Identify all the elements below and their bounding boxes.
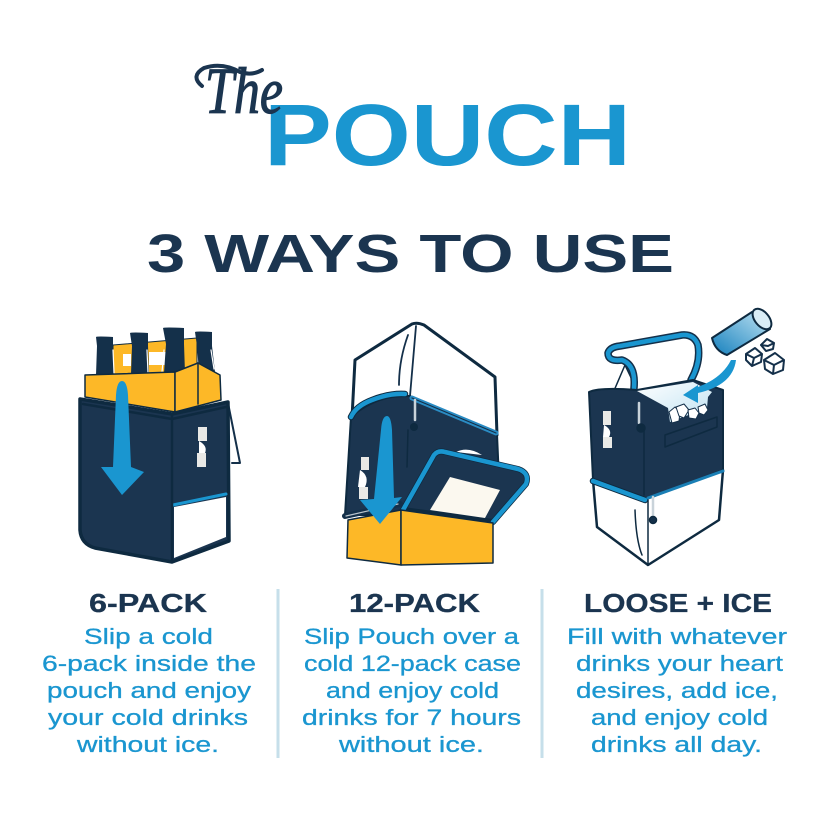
description: loose + ice: and enjoy cold — [591, 705, 768, 730]
falling ice cubes — [746, 339, 784, 374]
heading: 12-pack: 12-PACK — [349, 588, 480, 618]
bag white bottom — [593, 470, 723, 565]
can — [712, 312, 770, 355]
carton back handle — [113, 338, 197, 375]
can lid — [749, 305, 775, 333]
handle patches — [358, 457, 369, 499]
down arrow — [101, 381, 144, 495]
illustration: pouch over 12-pack — [345, 323, 527, 565]
description: loose + ice — [567, 624, 787, 757]
side zipper strip — [345, 504, 400, 516]
carton front face — [85, 372, 175, 412]
lid — [403, 451, 527, 522]
blue band — [593, 481, 645, 500]
bottle highlights — [113, 350, 214, 373]
description: 12-pack: and enjoy cold — [326, 678, 499, 703]
side strap — [228, 403, 240, 463]
front pocket — [665, 417, 717, 447]
flap triangle — [613, 365, 636, 393]
lid white square — [430, 477, 500, 518]
blue loop strap — [608, 335, 699, 388]
carton side face — [175, 363, 221, 412]
description: 12-pack: Slip Pouch over a — [304, 624, 520, 649]
description: 12-pack: without ice. — [338, 732, 484, 757]
white top section — [352, 323, 497, 435]
bag interior — [637, 382, 712, 422]
top seam — [83, 404, 226, 419]
ice cubes in bag — [669, 404, 708, 423]
title: script The: The — [205, 55, 283, 128]
navy body — [345, 396, 499, 515]
illustration: loose drinks and ice — [589, 305, 784, 565]
pouch body — [80, 399, 229, 562]
box left face — [347, 510, 401, 565]
description: 6-pack: Slip a cold — [84, 624, 213, 649]
description: 12-pack — [302, 624, 521, 757]
description: 6-pack: your cold drinks — [48, 705, 248, 730]
zipper — [412, 398, 496, 433]
lower zipper — [648, 471, 723, 498]
description: 6-pack — [42, 624, 256, 757]
corner seam — [171, 414, 173, 560]
description: loose + ice: Fill with whatever — [567, 624, 787, 649]
description: 12-pack: drinks for 7 hours — [302, 705, 521, 730]
handle patches — [603, 411, 612, 448]
column: 6-pack — [42, 588, 256, 757]
navy bag body — [589, 380, 723, 499]
pouch white panel — [174, 497, 226, 558]
down arrow — [360, 416, 402, 524]
blue rim — [351, 394, 405, 417]
heading: loose + ice: LOOSE + ICE — [584, 588, 772, 618]
description: 6-pack: pouch and enjoy — [47, 678, 251, 703]
description: 6-pack: without ice. — [76, 732, 219, 757]
column: 12-pack — [302, 588, 521, 757]
fold creases — [399, 326, 416, 396]
description: 12-pack: cold 12-pack case — [304, 651, 521, 676]
handle patches — [197, 427, 207, 467]
pouch blue band — [173, 494, 226, 505]
bottles — [96, 328, 215, 375]
curved arrow — [683, 360, 736, 403]
description: loose + ice: drinks your heart — [576, 651, 783, 676]
description: 6-pack: 6-pack inside the — [42, 651, 256, 676]
title: POUCH: POUCH — [264, 87, 631, 184]
heading: 3 ways to use: 3 WAYS TO USE — [147, 224, 674, 284]
white peek above lid — [456, 450, 482, 455]
heading: 6-pack: 6-PACK — [89, 588, 207, 618]
script flourish on T — [196, 66, 262, 86]
white flap — [627, 338, 694, 392]
carton handle holes — [123, 352, 173, 366]
illustration: 6-pack in pouch — [80, 328, 240, 562]
description: loose + ice: drinks all day. — [591, 732, 762, 757]
column: loose + ice — [567, 588, 787, 757]
seams and zips — [635, 403, 656, 565]
box right face — [401, 510, 493, 565]
description: loose + ice: desires, add ice, — [576, 678, 778, 703]
zip pull and seam — [407, 400, 418, 467]
